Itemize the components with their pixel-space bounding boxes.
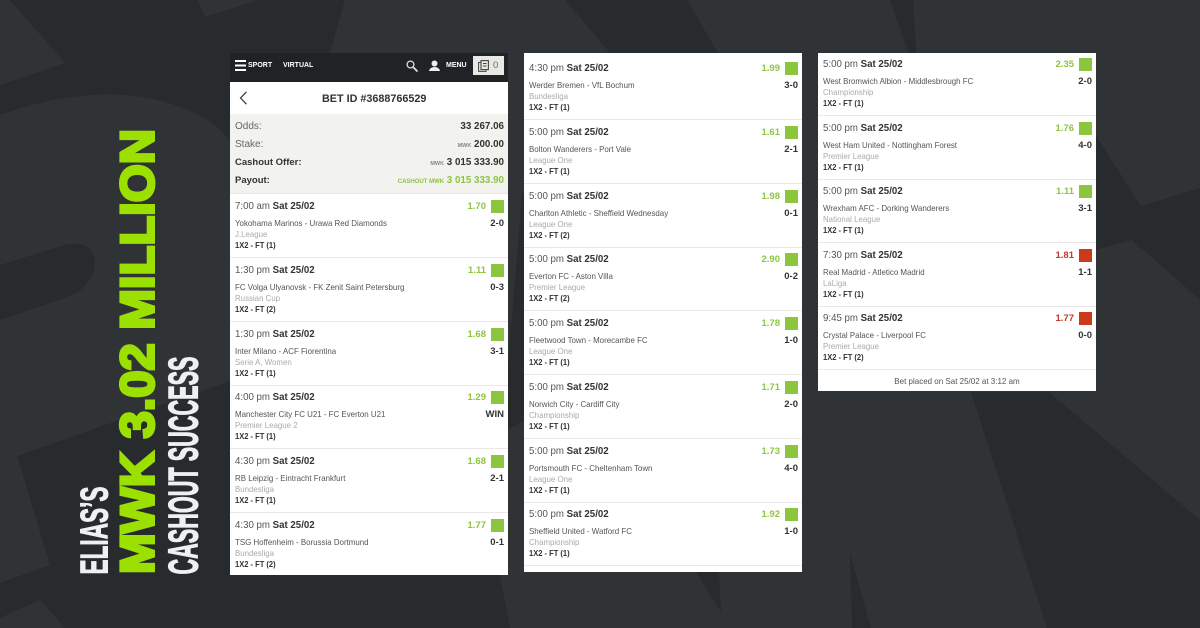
match row: West Bromwich Albion - Middlesbrough FC: 2-0 xyxy=(1078,76,1092,87)
match row: TSG Hoffenheim - Borussia Dortmund: 1X2 - FT (2) xyxy=(235,559,276,569)
match row: FC Volga Ulyanovsk - FK Zenit Saint Petersburg: 0-3 xyxy=(490,282,504,293)
match row: West Bromwich Albion - Middlesbrough FC: 2.35 xyxy=(1056,59,1074,70)
match row: Wrexham AFC - Dorking Wanderers: 1X2 - FT (1) xyxy=(823,225,864,235)
match row: RB Leipzig - Eintracht Frankfurt: RB Leipzig - Eintracht Frankfurt xyxy=(235,473,345,483)
match row: Norwich City - Cardiff City: 5:00 pm Sat 25/02 xyxy=(529,382,609,393)
match row: Wrexham AFC - Dorking Wanderers xyxy=(818,179,1096,243)
icon: search xyxy=(406,60,418,72)
match row: Portsmouth FC - Cheltenham Town xyxy=(524,438,802,502)
match row: Portsmouth FC - Cheltenham Town: Portsmouth FC - Cheltenham Town xyxy=(529,462,652,472)
match row: Wrexham AFC - Dorking Wanderers: Wrexham AFC - Dorking Wanderers xyxy=(823,203,949,213)
match row: Yokohama Marinos - Urawa Red Diamonds: J.League xyxy=(235,229,267,239)
match row: TSG Hoffenheim - Borussia Dortmund: TSG Hoffenheim - Borussia Dortmund xyxy=(235,537,369,547)
match row: Bolton Wanderers - Port Vale xyxy=(524,120,802,184)
match row: Crystal Palace - Liverpool FC (lost): 1X2 - FT (2) xyxy=(823,352,864,362)
match row: Inter Milano - ACF Fiorentina: Inter Milano - ACF Fiorentina xyxy=(235,346,336,356)
match row: Bolton Wanderers - Port Vale: 2-1 xyxy=(784,144,798,155)
match row: Manchester City FC U21 - FC Everton U21: 4:00 pm Sat 25/02 xyxy=(235,392,315,403)
nav label: virtual: VIRTUAL xyxy=(283,62,313,68)
match row: Crystal Palace - Liverpool FC (lost): 9:45 pm Sat 25/02 xyxy=(823,313,903,324)
summary: cashout offer xyxy=(235,157,504,168)
headline line: MWK 3.02 MILLION: MWK 3.02 MILLION xyxy=(110,129,164,574)
top navigation bar xyxy=(230,53,508,82)
summary: odds: 33 267.06 xyxy=(460,121,504,132)
match row: Wrexham AFC - Dorking Wanderers: 5:00 pm Sat 25/02 xyxy=(823,186,903,197)
match row: West Ham United - Nottingham Forest: 1.76 xyxy=(1056,123,1074,134)
match row: Werder Bremen - VfL Bochum: 3-0 xyxy=(784,80,798,91)
match row: Norwich City - Cardiff City: Championship xyxy=(529,410,579,420)
match row: West Bromwich Albion - Middlesbrough FC: 5:00 pm Sat 25/02 xyxy=(823,59,903,70)
match row: FC Volga Ulyanovsk - FK Zenit Saint Petersburg: 1.11 xyxy=(468,265,486,276)
match row: West Bromwich Albion - Middlesbrough FC: 1X2 - FT (1) xyxy=(823,98,864,108)
summary: stake: MWK 200.00 xyxy=(458,139,504,150)
match row: Sheffield United - Watford FC: 1X2 - FT (1) xyxy=(529,548,570,558)
match row: Charlton Athletic - Sheffield Wednesday: 1X2 - FT (2) xyxy=(529,230,570,240)
match row: Inter Milano - ACF Fiorentina: Serie A, Women xyxy=(235,356,292,366)
match row: West Ham United - Nottingham Forest: 5:00 pm Sat 25/02 xyxy=(823,123,903,134)
match row: West Bromwich Albion - Middlesbrough FC: Championship xyxy=(823,87,873,97)
summary: payout: Payout: xyxy=(235,175,270,186)
match row: RB Leipzig - Eintracht Frankfurt: 4:30 pm Sat 25/02 xyxy=(235,456,315,467)
match row: Yokohama Marinos - Urawa Red Diamonds: 1X2 - FT (1) xyxy=(235,240,276,250)
match row: Sheffield United - Watford FC: Championship xyxy=(529,537,579,547)
match row: Werder Bremen - VfL Bochum: Bundesliga xyxy=(529,91,568,101)
match row: Crystal Palace - Liverpool FC (lost): 1.77 xyxy=(1056,313,1074,324)
match row: Fleetwood Town - Morecambe FC: 1-0 xyxy=(784,335,798,346)
match row: Real Madrid - Atletico Madrid (lost) xyxy=(818,243,1096,307)
match row: Everton FC - Aston Villa: 1X2 - FT (2) xyxy=(529,293,570,303)
match row: FC Volga Ulyanovsk - FK Zenit Saint Petersburg xyxy=(230,258,508,322)
match row: Werder Bremen - VfL Bochum: Werder Bremen - VfL Bochum xyxy=(529,80,635,90)
summary: cashout offer: MWK 3 015 333.90 xyxy=(430,157,504,168)
match row: Norwich City - Cardiff City: 1.71 xyxy=(762,382,780,393)
summary: payout xyxy=(235,175,504,186)
match row: Portsmouth FC - Cheltenham Town: 5:00 pm Sat 25/02 xyxy=(529,446,609,456)
match row: West Ham United - Nottingham Forest xyxy=(818,116,1096,180)
match row: RB Leipzig - Eintracht Frankfurt: Bundesliga xyxy=(235,484,274,494)
match row: TSG Hoffenheim - Borussia Dortmund: 1.77 xyxy=(468,520,486,531)
match row: Everton FC - Aston Villa: 0-2 xyxy=(784,271,798,282)
match row: Manchester City FC U21 - FC Everton U21: 1X2 - FT (1) xyxy=(235,431,276,441)
match row: Real Madrid - Atletico Madrid (lost): 7:30 pm Sat 25/02 xyxy=(823,250,903,261)
match row: TSG Hoffenheim - Borussia Dortmund xyxy=(230,513,508,577)
match row: Sheffield United - Watford FC: 1-0 xyxy=(784,526,798,537)
match row: FC Volga Ulyanovsk - FK Zenit Saint Petersburg: 1X2 - FT (2) xyxy=(235,304,276,314)
panel: match list, column 2 xyxy=(524,53,802,572)
summary: stake: Stake: xyxy=(235,139,263,150)
summary: cashout offer: Cashout Offer: xyxy=(235,157,302,168)
match row: Charlton Athletic - Sheffield Wednesday: 0-1 xyxy=(784,208,798,218)
match row: West Ham United - Nottingham Forest: Premier League xyxy=(823,151,879,161)
heading text: BET ID #3688766529 xyxy=(322,93,426,105)
icon: user xyxy=(429,60,440,71)
match row: Yokohama Marinos - Urawa Red Diamonds: Yokohama Marinos - Urawa Red Diamonds xyxy=(235,218,387,228)
match row: RB Leipzig - Eintracht Frankfurt: 1X2 - FT (1) xyxy=(235,495,276,505)
match row: Werder Bremen - VfL Bochum: 1X2 - FT (1) xyxy=(529,102,570,112)
match row: Crystal Palace - Liverpool FC (lost): Premier League xyxy=(823,341,879,351)
match row: Norwich City - Cardiff City: 1X2 - FT (1) xyxy=(529,421,570,431)
match row: Wrexham AFC - Dorking Wanderers: National League xyxy=(823,214,880,224)
icon: back arrow xyxy=(240,91,247,105)
match row: Norwich City - Cardiff City xyxy=(524,375,802,439)
match row: RB Leipzig - Eintracht Frankfurt: 1.68 xyxy=(468,456,486,467)
match row: Manchester City FC U21 - FC Everton U21: Premier League 2 xyxy=(235,420,298,430)
match row: Inter Milano - ACF Fiorentina: 1:30 pm Sat 25/02 xyxy=(235,328,315,340)
match row: Real Madrid - Atletico Madrid (lost): LaLiga xyxy=(823,278,847,288)
match row: Norwich City - Cardiff City: 2-0 xyxy=(784,399,798,410)
match row: FC Volga Ulyanovsk - FK Zenit Saint Petersburg: Russian Cup xyxy=(235,293,280,303)
match row: Real Madrid - Atletico Madrid (lost): 1-1 xyxy=(1078,267,1092,278)
match row: Charlton Athletic - Sheffield Wednesday: Charlton Athletic - Sheffield Wednesday xyxy=(529,208,668,218)
match row: Bolton Wanderers - Port Vale: Bolton Wanderers - Port Vale xyxy=(529,144,631,154)
match row: Bolton Wanderers - Port Vale: 1X2 - FT (1) xyxy=(529,166,570,176)
match row: Portsmouth FC - Cheltenham Town: League One xyxy=(529,474,572,484)
match row: Fleetwood Town - Morecambe FC: 1X2 - FT (1) xyxy=(529,357,570,367)
nav label: menu: MENU xyxy=(446,62,467,68)
match row: RB Leipzig - Eintracht Frankfurt: 2-1 xyxy=(490,473,504,484)
match row: Fleetwood Town - Morecambe FC: 1.78 xyxy=(762,318,780,329)
match row: Manchester City FC U21 - FC Everton U21 xyxy=(230,385,508,449)
bet summary xyxy=(230,114,508,194)
summary: odds xyxy=(235,121,504,132)
match row: Werder Bremen - VfL Bochum: 4:30 pm Sat 25/02 xyxy=(529,63,609,74)
match row: Everton FC - Aston Villa: 2.90 xyxy=(762,254,780,265)
match row: Everton FC - Aston Villa: Premier League xyxy=(529,282,585,292)
match row: West Ham United - Nottingham Forest: 4-0 xyxy=(1078,140,1092,151)
match row: Real Madrid - Atletico Madrid (lost): 1.81 xyxy=(1056,250,1074,261)
icon: hamburger menu xyxy=(235,60,246,71)
match row: Real Madrid - Atletico Madrid (lost): 1X2 - FT (1) xyxy=(823,289,864,299)
match row: Sheffield United - Watford FC: 1.92 xyxy=(762,509,780,520)
match row: West Ham United - Nottingham Forest: West Ham United - Nottingham Forest xyxy=(823,140,957,150)
match row: Manchester City FC U21 - FC Everton U21: Manchester City FC U21 - FC Everton U21 xyxy=(235,409,385,419)
match row: West Ham United - Nottingham Forest: 1X2 - FT (1) xyxy=(823,162,864,172)
match row: Sheffield United - Watford FC xyxy=(524,502,802,566)
match row: Portsmouth FC - Cheltenham Town: 1X2 - FT (1) xyxy=(529,484,570,494)
match row: Sheffield United - Watford FC: 5:00 pm Sat 25/02 xyxy=(529,509,609,520)
match row: Fleetwood Town - Morecambe FC: 5:00 pm Sat 25/02 xyxy=(529,318,609,329)
match row: Werder Bremen - VfL Bochum: 1.99 xyxy=(762,63,780,74)
match row: Wrexham AFC - Dorking Wanderers: 1.11 xyxy=(1056,186,1074,197)
footer: bet placed timestamp: Bet placed on Sat 25/02 at 3:12 am xyxy=(894,377,1020,386)
match row: Real Madrid - Atletico Madrid (lost): Real Madrid - Atletico Madrid xyxy=(823,267,925,277)
match row: Yokohama Marinos - Urawa Red Diamonds: 1.70 xyxy=(468,201,486,212)
match row: Yokohama Marinos - Urawa Red Diamonds xyxy=(230,194,508,258)
match row: Fleetwood Town - Morecambe FC xyxy=(524,311,802,375)
match row: Crystal Palace - Liverpool FC (lost) xyxy=(818,306,1096,370)
match row: Charlton Athletic - Sheffield Wednesday: 1.98 xyxy=(762,190,780,202)
match row: Portsmouth FC - Cheltenham Town: 1.73 xyxy=(762,446,780,456)
nav label: sport: SPORT xyxy=(248,62,272,68)
match row: Manchester City FC U21 - FC Everton U21: WIN xyxy=(486,409,504,420)
match row: Bolton Wanderers - Port Vale: 5:00 pm Sat 25/02 xyxy=(529,127,609,138)
match row: Crystal Palace - Liverpool FC (lost): Crystal Palace - Liverpool FC xyxy=(823,330,926,340)
summary: stake xyxy=(235,139,504,150)
match row: Crystal Palace - Liverpool FC (lost): 0-0 xyxy=(1078,330,1092,341)
panel: bet slip details, column 1 xyxy=(230,53,508,575)
match row: Inter Milano - ACF Fiorentina: 1X2 - FT (1) xyxy=(235,368,276,378)
match row: FC Volga Ulyanovsk - FK Zenit Saint Petersburg: 1:30 pm Sat 25/02 xyxy=(235,265,315,276)
match row: Fleetwood Town - Morecambe FC: Fleetwood Town - Morecambe FC xyxy=(529,335,648,345)
match row: Everton FC - Aston Villa xyxy=(524,247,802,311)
headline line: CASHOUT SUCCESS: CASHOUT SUCCESS xyxy=(160,356,206,574)
summary: odds: Odds: xyxy=(235,121,262,132)
icon: betslip xyxy=(478,60,489,72)
match row: Inter Milano - ACF Fiorentina xyxy=(230,322,508,386)
match row: Norwich City - Cardiff City: Norwich City - Cardiff City xyxy=(529,399,619,409)
match row: Inter Milano - ACF Fiorentina: 1.68 xyxy=(468,328,486,340)
match row: TSG Hoffenheim - Borussia Dortmund: 4:30 pm Sat 25/02 xyxy=(235,520,315,531)
match row: Yokohama Marinos - Urawa Red Diamonds: 7:00 am Sat 25/02 xyxy=(235,201,315,212)
match row: Yokohama Marinos - Urawa Red Diamonds: 2-0 xyxy=(490,218,504,229)
match row: West Bromwich Albion - Middlesbrough FC xyxy=(818,52,1096,116)
match row: FC Volga Ulyanovsk - FK Zenit Saint Petersburg: FC Volga Ulyanovsk - FK Zenit Saint Petersburg xyxy=(235,282,404,292)
betslip count: 0 xyxy=(493,60,498,71)
match row: Bolton Wanderers - Port Vale: League One xyxy=(529,155,572,165)
match row: Everton FC - Aston Villa: Everton FC - Aston Villa xyxy=(529,271,613,281)
betslip button xyxy=(473,56,504,75)
headline line: ELIAS'S: ELIAS’S xyxy=(74,486,116,574)
match row: Fleetwood Town - Morecambe FC: League One xyxy=(529,346,572,356)
match row: Portsmouth FC - Cheltenham Town: 4-0 xyxy=(784,462,798,474)
summary: payout: CASHOUT MWK 3 015 333.90 xyxy=(398,175,504,186)
match row: Wrexham AFC - Dorking Wanderers: 3-1 xyxy=(1078,203,1092,214)
match row: Charlton Athletic - Sheffield Wednesday: 5:00 pm Sat 25/02 xyxy=(529,190,609,202)
match row: TSG Hoffenheim - Borussia Dortmund: 0-1 xyxy=(490,537,504,548)
match row: RB Leipzig - Eintracht Frankfurt xyxy=(230,449,508,513)
match row: Inter Milano - ACF Fiorentina: 3-1 xyxy=(490,346,504,356)
match row: Werder Bremen - VfL Bochum xyxy=(524,56,802,120)
match row: Sheffield United - Watford FC: Sheffield United - Watford FC xyxy=(529,526,632,536)
match row: West Bromwich Albion - Middlesbrough FC: West Bromwich Albion - Middlesbrough FC xyxy=(823,76,973,86)
match row: Manchester City FC U21 - FC Everton U21: 1.29 xyxy=(468,392,486,403)
match row: Bolton Wanderers - Port Vale: 1.61 xyxy=(762,127,780,138)
match row: Charlton Athletic - Sheffield Wednesday xyxy=(524,184,802,248)
match row: TSG Hoffenheim - Borussia Dortmund: Bundesliga xyxy=(235,548,274,558)
bet id heading xyxy=(230,82,508,114)
panel: match list, column 3 xyxy=(818,53,1096,391)
match row: Charlton Athletic - Sheffield Wednesday: League One xyxy=(529,218,572,228)
match row: Everton FC - Aston Villa: 5:00 pm Sat 25/02 xyxy=(529,254,609,265)
